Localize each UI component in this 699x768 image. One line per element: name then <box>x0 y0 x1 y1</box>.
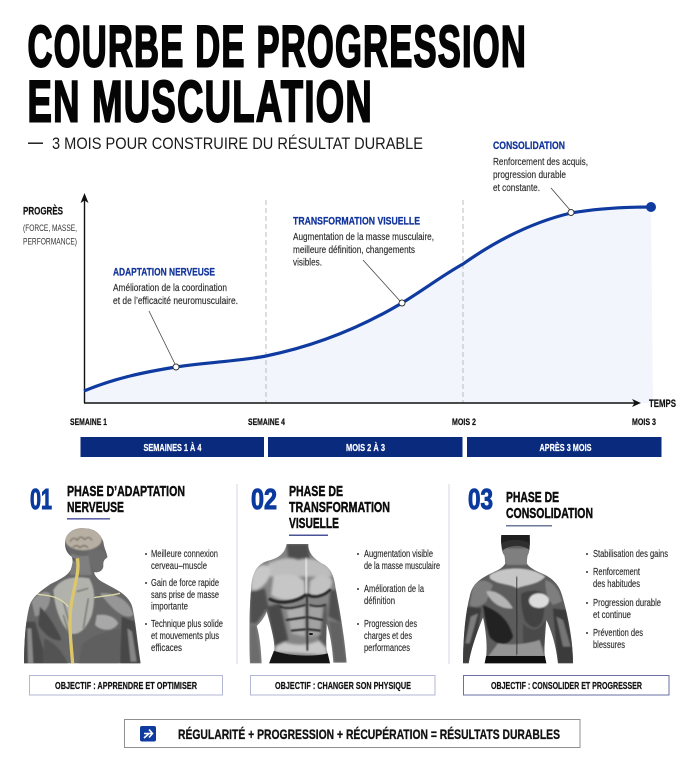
bullet list phase 3: Stabilisation des gains <box>593 549 668 560</box>
bullet list phase 2: Augmentation visible <box>364 549 433 560</box>
heading phase 1 <box>67 483 185 520</box>
heading phase 2 <box>289 483 390 536</box>
footer text: RÉGULARITÉ + PROGRESSION + RÉCUPÉRATION = RÉSULTATS DURABLES <box>178 726 560 742</box>
phase bar: apres 3 mois <box>467 437 662 457</box>
bullet list phase 2: performances <box>364 643 410 654</box>
footer banner <box>124 720 580 748</box>
chart: progression curve <box>80 188 656 407</box>
annotation: consolidation: CONSOLIDATION <box>493 140 565 152</box>
annotation: adaptation nerveuse <box>113 266 238 307</box>
heading phase 3 <box>506 489 593 526</box>
heading phase 3: PHASE DE <box>506 489 559 506</box>
annotation: transformation visuelle: TRANSFORMATION VISUELLE <box>293 216 420 228</box>
end point <box>646 202 656 212</box>
y axis label <box>23 204 77 248</box>
y axis arrow <box>80 193 88 403</box>
y axis label: PERFORMANCE) <box>23 236 77 248</box>
panel: phase 3 <box>458 484 669 695</box>
heading phase 2: TRANSFORMATION <box>289 499 390 516</box>
annotation: consolidation: Renforcement des acquis, <box>493 157 588 168</box>
icon: arrow badge <box>140 726 156 742</box>
objective box phase 3 <box>464 676 669 695</box>
bullet list phase 1: cerveau–muscle <box>151 561 207 572</box>
illustration: muscular back <box>463 535 573 664</box>
annotation: transformation visuelle: visibles. <box>293 258 322 268</box>
bullet list phase 1: importante <box>151 602 188 612</box>
annotation: transformation visuelle: meilleure définition, changements <box>293 245 415 256</box>
phase bar: semaines 1 a 4 <box>80 437 264 457</box>
heading phase 1: PHASE D’ADAPTATION <box>67 483 185 500</box>
phase dividers <box>266 200 463 403</box>
annotation: consolidation: et constante. <box>493 183 540 194</box>
number 02: 02 <box>251 484 277 516</box>
illustration: back with nervous system <box>20 525 145 665</box>
time labels: MOIS 3 <box>632 417 656 427</box>
heading phase 3: CONSOLIDATION <box>506 505 593 522</box>
annotation: adaptation nerveuse: Amélioration de la coordination <box>113 283 227 294</box>
objective box phase 1 <box>30 676 222 695</box>
bullet list phase 3: Renforcement <box>593 567 640 578</box>
subtitle: 3 MOIS POUR CONSTRUIRE DU RÉSULTAT DURABLE <box>52 134 423 153</box>
illustration: muscular torso front <box>249 544 347 664</box>
bullet list phase 2: de la masse musculaire <box>364 561 440 572</box>
bullet list phase 1 <box>145 549 223 654</box>
objective box phase 3: OBJECTIF : CONSOLIDER ET PROGRESSER <box>491 681 643 692</box>
curve line <box>84 207 651 391</box>
objective box phase 2: OBJECTIF : CHANGER SON PHYSIQUE <box>275 681 411 692</box>
title: EN MUSCULATION <box>28 70 373 134</box>
annotation: consolidation: progression durable <box>493 170 566 181</box>
phase bar: mois 2 a 3 <box>268 437 462 457</box>
phase bar: apres 3 mois: APRÈS 3 MOIS <box>540 441 592 454</box>
bullet list phase 3: et continue <box>593 610 631 621</box>
bullet list phase 2: Amélioration de la <box>364 584 424 595</box>
objective box phase 2 <box>250 676 435 695</box>
annotation: transformation visuelle <box>293 216 434 268</box>
curve area fill <box>84 207 653 403</box>
bullet list phase 3: Progression durable <box>593 598 661 609</box>
annotation: transformation visuelle: Augmentation de la masse musculaire, <box>293 232 434 243</box>
phase bar: mois 2 a 3: MOIS 2 À 3 <box>346 441 385 454</box>
annotation: adaptation nerveuse: et de l’efficacité neuromusculaire. <box>113 296 238 307</box>
time labels: SEMAINE 4 <box>248 417 285 427</box>
annotation: adaptation nerveuse: ADAPTATION NERVEUSE <box>113 266 215 278</box>
bullet list phase 2: Progression des <box>364 619 417 630</box>
bullet list phase 2: définition <box>364 596 395 607</box>
bullet list phase 1: sans prise de masse <box>151 590 219 601</box>
bullet list phase 1: Technique plus solide <box>151 619 223 630</box>
curve markers <box>173 210 574 370</box>
bullet list phase 1: Gain de force rapide <box>151 578 219 589</box>
bullet list phase 3 <box>586 549 668 651</box>
bullet list phase 2: charges et des <box>364 631 412 642</box>
time labels: MOIS 2 <box>452 417 476 427</box>
objective box phase 1: OBJECTIF : APPRENDRE ET OPTIMISER <box>55 681 198 692</box>
bullet list phase 3: blessures <box>593 640 625 651</box>
phase bar: semaines 1 a 4: SEMAINES 1 À 4 <box>144 441 202 454</box>
bullet list phase 3: des habitudes <box>593 579 640 590</box>
panel separators <box>237 484 449 664</box>
y axis label: (FORCE, MASSE, <box>23 223 77 234</box>
time labels: SEMAINE 1 <box>70 417 107 427</box>
leader lines <box>149 188 570 364</box>
annotation: consolidation <box>493 140 588 194</box>
bullet list phase 1: efficaces <box>151 643 182 654</box>
number 01: 01 <box>30 484 52 516</box>
x axis arrow <box>84 399 641 407</box>
heading phase 2: PHASE DE <box>289 483 343 500</box>
heading phase 2: VISUELLE <box>289 515 339 532</box>
x axis label: TEMPS <box>649 398 676 410</box>
title <box>28 14 527 134</box>
panel: phase 1 <box>20 483 223 695</box>
panel: phase 2 <box>245 483 440 695</box>
y axis label: PROGRÈS <box>23 204 63 218</box>
time labels <box>70 417 656 427</box>
bullet list phase 2 <box>357 549 440 654</box>
number 03: 03 <box>468 484 493 516</box>
bullet list phase 1: et mouvements plus <box>151 631 219 642</box>
bullet list phase 3: Prévention des <box>593 628 643 639</box>
bullet list phase 1: Meilleure connexion <box>151 549 218 560</box>
heading phase 1: NERVEUSE <box>67 499 124 516</box>
